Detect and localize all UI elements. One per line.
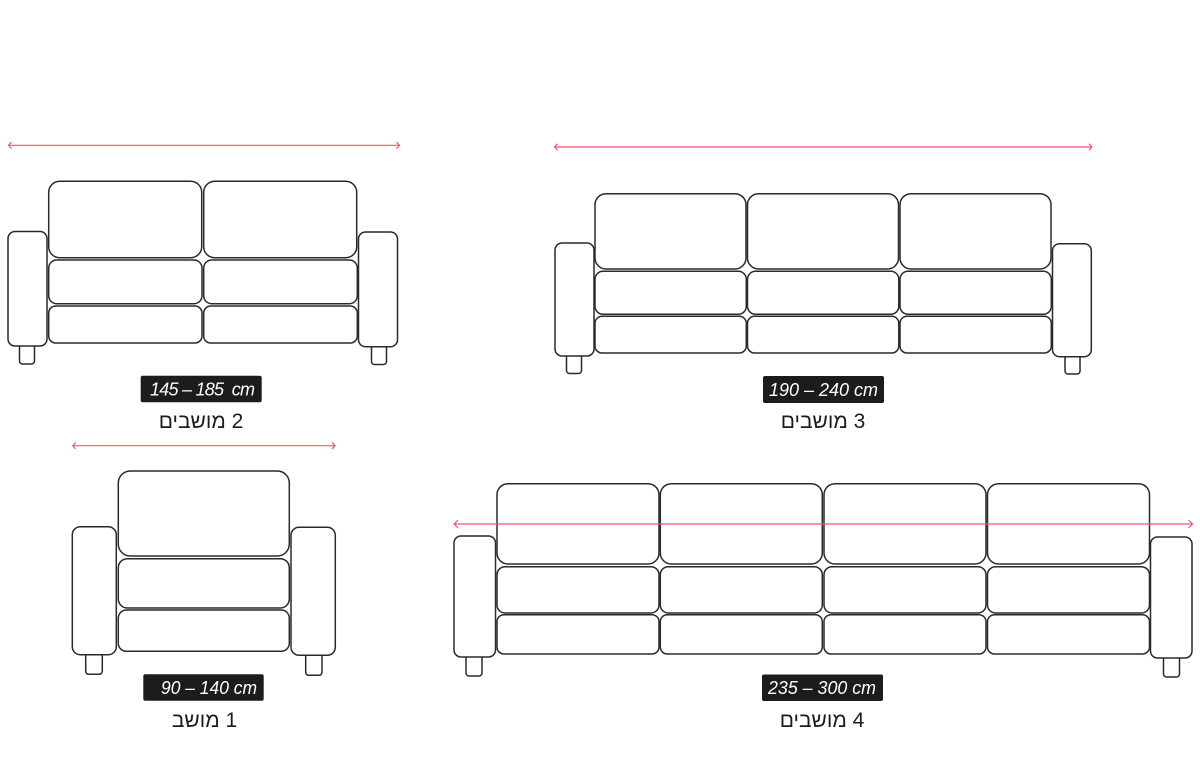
badge: 235–300 cm: [762, 674, 883, 701]
badge: 145–185 cm: [141, 376, 262, 402]
arrow: 3-seat width: [554, 144, 1092, 150]
label: 3 seats: 3 מושבים: [781, 410, 865, 433]
icon: 4-seat sofa drawing: [454, 484, 1192, 677]
panel: 3-seat sofa: [554, 144, 1092, 433]
badge: 90–140 cm: 90 – 140 cm: [161, 678, 257, 698]
icon: 3-seat sofa drawing: [555, 194, 1091, 374]
panel: 1-seat sofa: [72, 442, 335, 732]
badge: 90–140 cm: [143, 674, 264, 701]
icon: 2-seat sofa drawing: [8, 181, 398, 364]
panel: 4-seat sofa: [454, 484, 1192, 732]
arrow: 1-seat width: [73, 442, 335, 449]
badge: 145–185 cm: 145 – 185 cm: [150, 380, 255, 400]
arrow: 4-seat width: [454, 520, 1192, 528]
icon: 1-seat sofa drawing: [72, 471, 335, 675]
label: 2 seats: 2 מושבים: [159, 410, 243, 433]
badge: 235–300 cm: 235 – 300 cm: [767, 678, 876, 698]
label: 1 seat: 1 מושב: [172, 709, 237, 732]
panel: 2-seat sofa: [8, 142, 400, 433]
badge: 190–240 cm: [763, 376, 884, 403]
label: 4 seats: 4 מושבים: [780, 709, 865, 732]
badge: 190–240 cm: 190 – 240 cm: [769, 380, 878, 400]
arrow: 2-seat width: [8, 142, 400, 149]
